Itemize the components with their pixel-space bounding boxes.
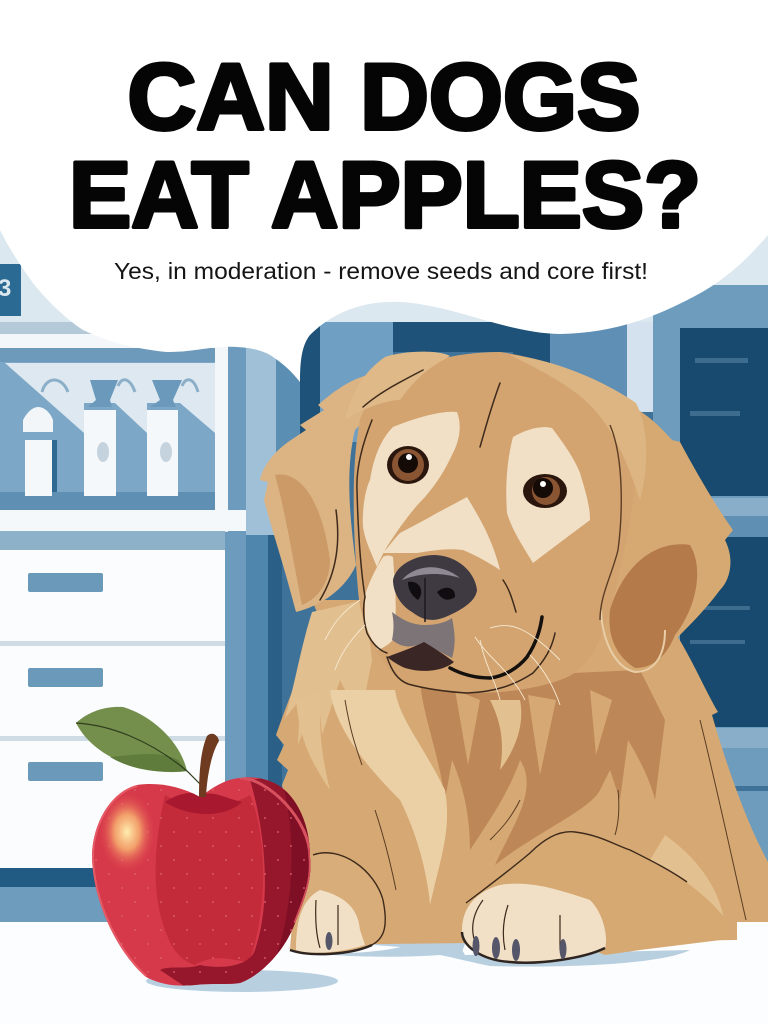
title bbox=[69, 44, 701, 247]
icon: apple bbox=[76, 707, 320, 990]
title line 1: CAN DOGS bbox=[128, 44, 640, 149]
bottles on shelf bbox=[23, 380, 198, 496]
center blaze bbox=[383, 497, 500, 570]
left eye bbox=[387, 446, 429, 484]
apple leaf bbox=[76, 707, 200, 784]
right ear shading bbox=[609, 544, 697, 668]
chest strands tan bbox=[455, 690, 612, 775]
subtitle: Yes, in moderation - remove seeds and core first! bbox=[114, 258, 648, 284]
sign block bbox=[0, 264, 21, 316]
dog head bbox=[354, 352, 637, 693]
left paw bbox=[290, 853, 386, 954]
left eye patch bbox=[363, 412, 460, 567]
right arm bbox=[466, 832, 737, 955]
right paw bbox=[462, 884, 606, 963]
chest fur brown bbox=[420, 670, 665, 865]
face lines bbox=[320, 370, 555, 693]
body fur lines bbox=[345, 700, 746, 920]
dog bbox=[260, 352, 768, 963]
left top fur bbox=[345, 352, 450, 420]
table surface bbox=[0, 922, 768, 1024]
whiskers bbox=[325, 600, 560, 705]
paw and apple shadows bbox=[146, 915, 690, 992]
smile line bbox=[450, 617, 542, 678]
dog body bbox=[276, 600, 768, 945]
speech bubble bbox=[0, 0, 768, 382]
right ear back bbox=[600, 402, 733, 672]
apple stem bbox=[199, 734, 219, 797]
nose bbox=[393, 555, 477, 622]
right eye patch bbox=[506, 427, 590, 563]
apple body bbox=[92, 777, 310, 986]
left muzzle cream bbox=[365, 556, 396, 650]
side fur strands bbox=[296, 690, 725, 925]
neck fluff bbox=[285, 600, 372, 745]
chest fur cream bbox=[330, 690, 447, 905]
right eye bbox=[523, 474, 567, 508]
under nose grey bbox=[392, 612, 455, 658]
arm outline bbox=[466, 832, 687, 903]
right top fur bbox=[510, 355, 646, 500]
mouth interior bbox=[387, 642, 454, 671]
left ear bbox=[260, 372, 400, 612]
counter and drawers bbox=[0, 510, 300, 924]
title line 2: EAT APPLES? bbox=[69, 142, 701, 247]
